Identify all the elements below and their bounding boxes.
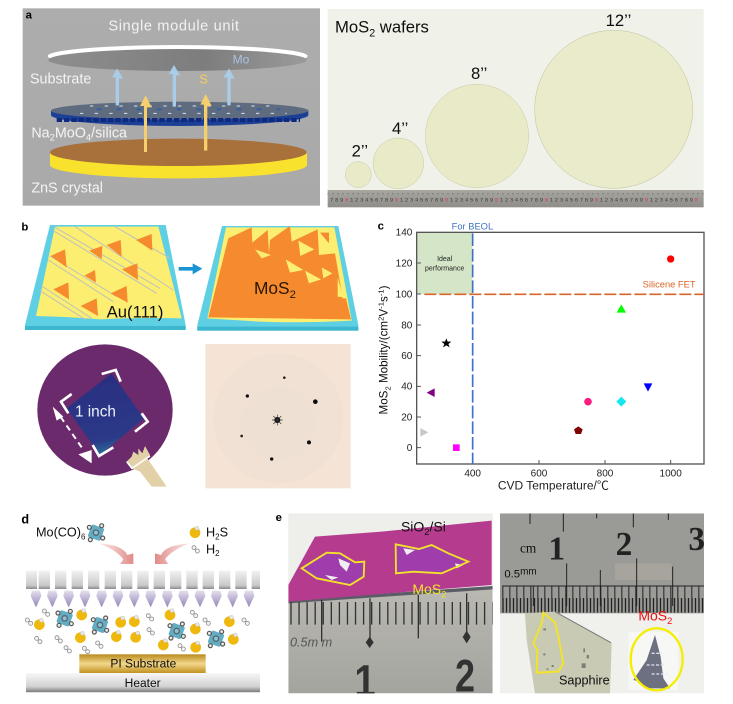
- y tick labels: 0: [407, 443, 413, 454]
- label 12 inch: 12’’: [606, 11, 631, 30]
- photo: MoS2 on SiO2/Si with ruler: 2: [455, 651, 475, 702]
- photo: MoS2 on sapphire with steel ruler: cm: [520, 541, 537, 556]
- legend: H2S: 2: [215, 532, 220, 541]
- label: Na2MoO4/silica: 4: [86, 133, 91, 143]
- legend: H2: [192, 542, 220, 558]
- panel b: [21, 222, 358, 488]
- photo: MoS2 on SiO2/Si with ruler: /Si: [430, 519, 446, 535]
- wafer 4 inch: [373, 138, 424, 189]
- x axis title: CVD Temperature/℃: [498, 479, 609, 493]
- label Silicene FET: Silicene FET: [643, 279, 696, 289]
- x tick labels: 400: [464, 468, 481, 479]
- photo: MoS2 on sapphire with steel ruler: [500, 513, 705, 693]
- arrows: Mo vapour: [112, 65, 235, 107]
- label MoS2: MoS: [254, 278, 290, 298]
- wafer 12 inch: [535, 30, 693, 188]
- y axis title: Mobility/(cm: [378, 321, 391, 386]
- photo: MoS2 on SiO2/Si with ruler: [288, 513, 493, 704]
- y axis title: ): [378, 285, 391, 289]
- photo: MoS2 on sapphire with steel ruler: mm: [520, 567, 537, 578]
- ideal performance region: Ideal: [437, 256, 453, 263]
- photo: MoS2 on SiO2/Si with ruler: 2: [441, 589, 446, 599]
- gas flow arrows: [31, 591, 254, 607]
- y axis title: -1: [377, 302, 386, 309]
- label: Na2MoO4/silica: MoO: [55, 125, 86, 141]
- label 2 inch: 2’’: [352, 142, 368, 161]
- label: substrate: Substrate: [30, 71, 91, 87]
- substrate disc: [48, 45, 308, 71]
- y tick labels: 100: [396, 289, 413, 300]
- heater: Heater: [125, 676, 161, 690]
- panel label a: a: [26, 9, 33, 21]
- y tick labels: 120: [396, 258, 413, 269]
- y tick labels: [396, 228, 413, 454]
- diffraction pattern photo: [205, 344, 351, 488]
- heater: [26, 673, 260, 692]
- photo: MoS2 on SiO2/Si with ruler: 2: [424, 527, 430, 537]
- y tick labels: 80: [401, 320, 413, 331]
- panel d: MOCVD schematic: [21, 512, 260, 692]
- label 8 inch: 8’’: [471, 64, 487, 83]
- legend: Mo(CO)6: 6: [81, 532, 86, 541]
- silicene FET line: [424, 292, 704, 297]
- photo: MoS2 on sapphire with steel ruler: Sapphire: [559, 673, 610, 687]
- plate: Au(111) with MoS2 triangles: [25, 225, 186, 330]
- panel a: single module unit: [23, 8, 320, 206]
- photo: 1 inch film on wafer: [37, 344, 173, 487]
- photo: MoS2 on SiO2/Si with ruler: MoS: [412, 581, 441, 597]
- legend: H2: H: [206, 542, 215, 556]
- ZnS crystal disc: [50, 139, 307, 178]
- panel label b: b: [21, 222, 28, 234]
- y tick labels: 20: [401, 412, 413, 423]
- BEOL limit line: [470, 233, 475, 464]
- inlet arrow left: [98, 543, 133, 564]
- x tick labels: 800: [597, 468, 614, 479]
- PI substrate: PI Substrate: [110, 657, 177, 671]
- y axis title: -1: [377, 289, 386, 296]
- y tick labels: 40: [401, 382, 413, 393]
- data points: [420, 255, 674, 451]
- photo: MoS2 on sapphire with steel ruler: 1: [548, 530, 565, 567]
- legend: Mo(CO)6: [36, 524, 105, 542]
- panel label d: d: [21, 512, 29, 526]
- ideal performance region: performance: [425, 266, 464, 273]
- wafer 2 inch: [345, 162, 371, 188]
- panel a: MoS2 wafers photo: [328, 9, 704, 207]
- label 4 inch: 4’’: [392, 119, 408, 138]
- legend: Mo(CO)6: Mo(CO): [36, 526, 81, 540]
- plate: continuous MoS2 film: [197, 226, 358, 331]
- molecules: [25, 609, 249, 654]
- PI substrate: [79, 654, 206, 673]
- y tick labels: 140: [396, 228, 413, 239]
- legend: H2S: H: [206, 526, 215, 540]
- heading: MoS: [335, 18, 369, 37]
- inlet arrow right: [155, 543, 190, 564]
- photo: MoS2 on sapphire with steel ruler: 2: [667, 616, 672, 626]
- showerhead: [26, 571, 260, 589]
- legend: H2S: S: [220, 526, 228, 540]
- label: S: S: [199, 72, 208, 86]
- label For BEOL: For BEOL: [452, 222, 493, 232]
- panel label e: e: [276, 512, 282, 524]
- ruler: [328, 190, 704, 207]
- y axis title: s: [378, 296, 391, 302]
- x tick labels: 1000: [660, 468, 682, 479]
- y tick labels: 60: [401, 351, 413, 362]
- panel c: mobility scatter chart: [377, 220, 704, 493]
- legend: H2: 2: [215, 549, 220, 558]
- photo: MoS2 on sapphire with steel ruler: 3: [688, 521, 705, 558]
- heading: Single module unit: [108, 19, 239, 35]
- heading: 2: [369, 28, 375, 40]
- label: Mo: Mo: [233, 53, 250, 67]
- photo: MoS2 on sapphire with steel ruler: 2: [616, 526, 632, 563]
- y axis title: 2: [377, 317, 386, 321]
- label: Na2MoO4/silica: /silica: [91, 125, 127, 141]
- panel e: [276, 512, 705, 704]
- photo: MoS2 on sapphire with steel ruler: 0.5: [504, 568, 520, 580]
- y axis title: V: [378, 309, 391, 317]
- y axis title: MoS: [378, 391, 391, 415]
- label Au(111): Au(111): [107, 302, 163, 321]
- legend: H2S: [190, 526, 228, 541]
- photo: MoS2 on SiO2/Si with ruler: SiO: [401, 519, 424, 535]
- x tick labels: 600: [531, 468, 548, 479]
- Na2MoO4 silica disc: [51, 102, 308, 126]
- axes frame: [417, 232, 704, 464]
- wafer 8 inch: [425, 84, 529, 188]
- label: Na2MoO4/silica: Na: [31, 125, 50, 141]
- label: ZnS crystal: ZnS crystal: [31, 181, 103, 197]
- photo: MoS2 on sapphire with steel ruler: MoS: [638, 608, 667, 624]
- label MoS2: 2: [290, 289, 296, 301]
- label: Na2MoO4/silica: 2: [50, 133, 55, 143]
- y axis title: 2: [383, 386, 392, 391]
- heading: wafers: [375, 18, 429, 37]
- panel label c: c: [378, 220, 384, 232]
- ruler: 78901234567890123456789012345678901234567890123456789012345678901234567890: [330, 196, 700, 203]
- photo: 1 inch film on wafer: 1 inch: [75, 404, 116, 421]
- arrows: S vapour: [140, 94, 212, 152]
- x tick labels: [464, 468, 682, 479]
- arrow: [179, 263, 202, 274]
- photo: MoS2 on SiO2/Si with ruler: 0.5m m: [290, 636, 332, 650]
- ideal performance region: [417, 232, 472, 294]
